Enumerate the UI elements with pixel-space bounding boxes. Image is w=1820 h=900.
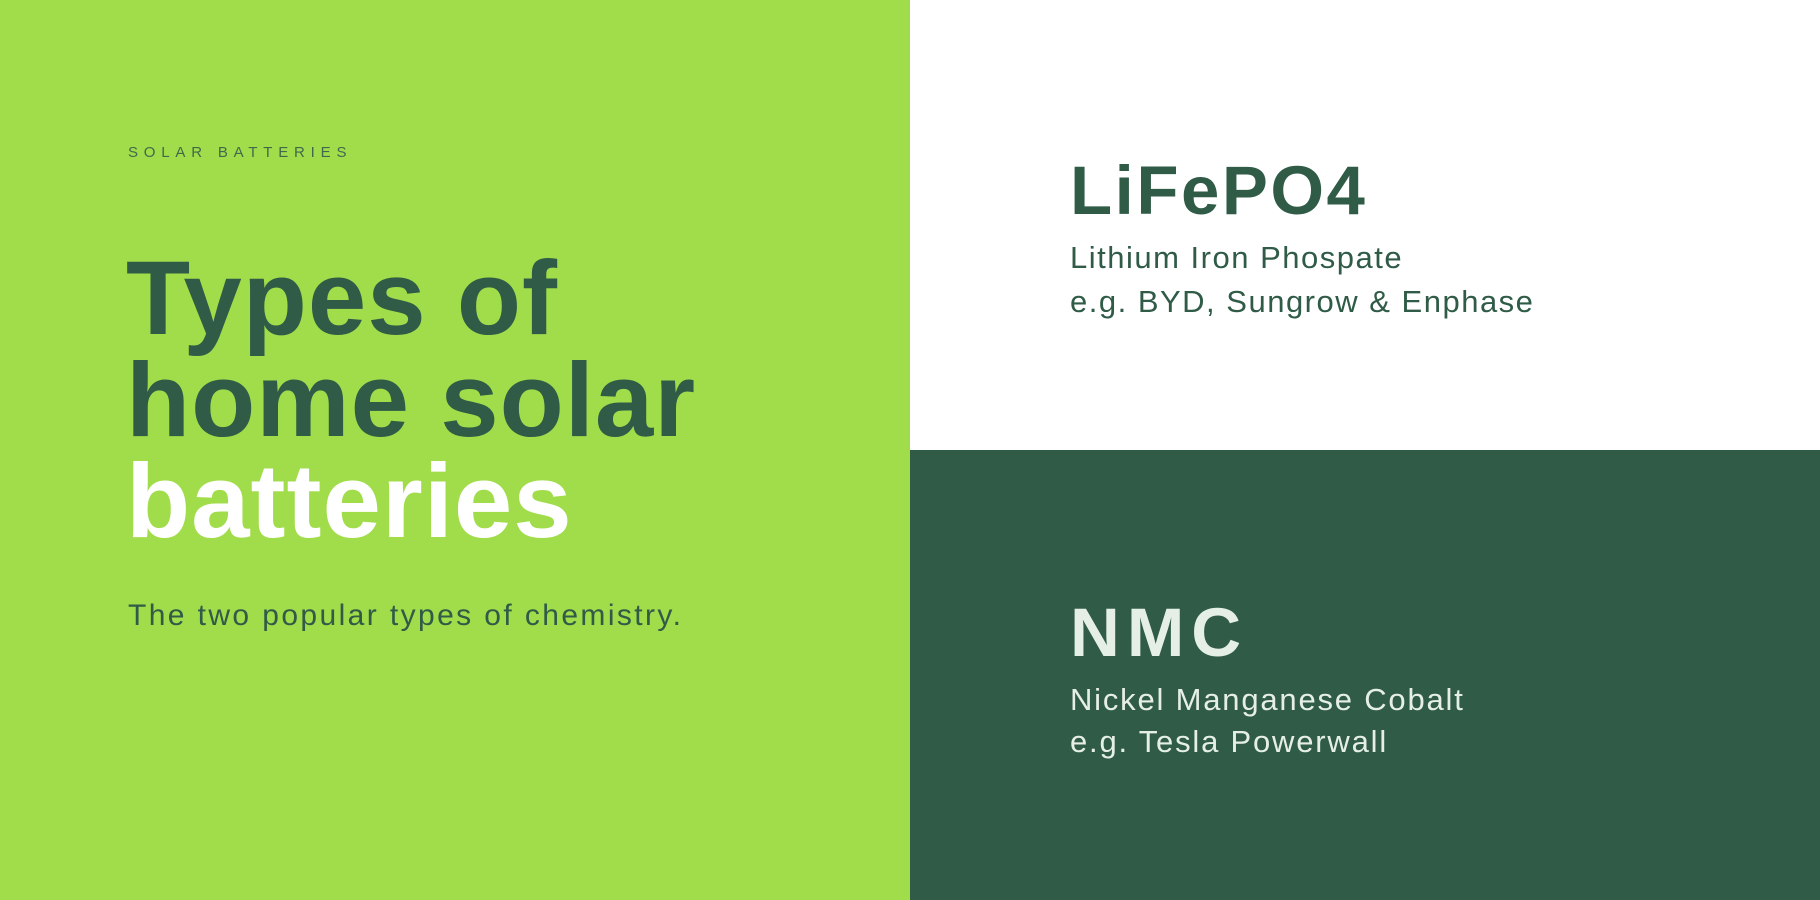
title — [126, 240, 696, 560]
heading LiFePO4: LiFePO4 — [1070, 152, 1367, 229]
description NMC: Nickel Manganese Cobalt — [1070, 682, 1465, 717]
description NMC: e.g. Tesla Powerwall — [1070, 724, 1388, 759]
title: batteries — [126, 443, 573, 560]
heading NMC: NMC — [1070, 594, 1248, 671]
panel: left green — [0, 0, 910, 900]
title: Types of — [126, 240, 558, 357]
title: home solar — [126, 342, 696, 458]
description LiFePO4 — [1070, 240, 1534, 319]
panel: NMC — [910, 450, 1820, 900]
panel: LiFePO4 — [910, 0, 1820, 450]
subtitle: The two popular types of chemistry. — [128, 599, 683, 632]
eyebrow label: SOLAR BATTERIES — [128, 144, 352, 161]
description NMC — [1070, 682, 1465, 759]
description LiFePO4: Lithium Iron Phospate — [1070, 240, 1403, 275]
description LiFePO4: e.g. BYD, Sungrow & Enphase — [1070, 284, 1534, 319]
